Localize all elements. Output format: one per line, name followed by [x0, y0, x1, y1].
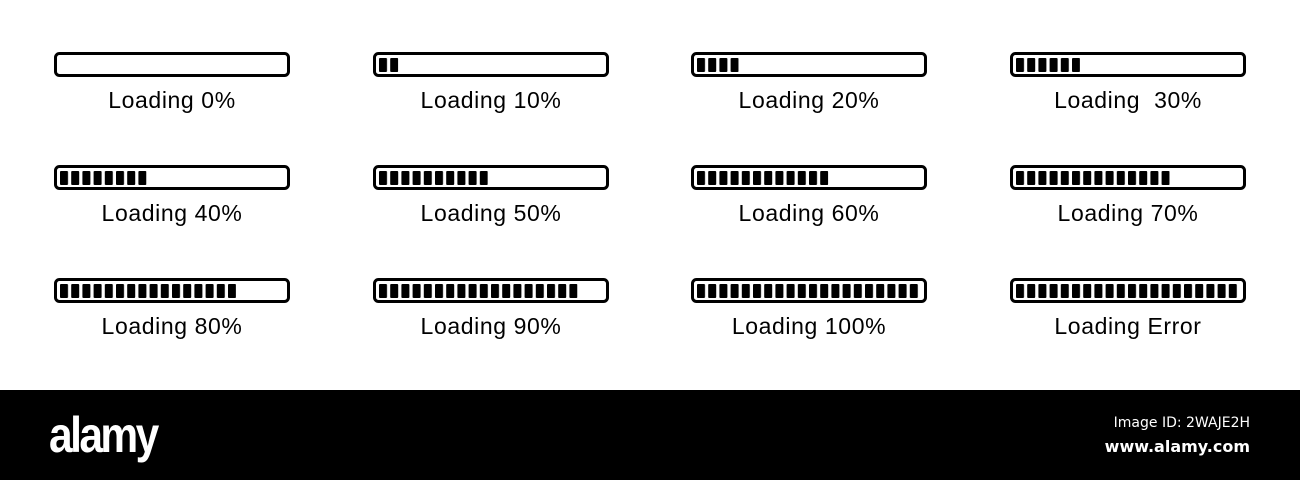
progress 100%: Loading 100% [732, 313, 886, 339]
progress 10% [374, 54, 608, 113]
website: www.alamy.com [1105, 437, 1250, 456]
progress 100% [692, 280, 926, 339]
progress error [1012, 280, 1244, 339]
progress 30% [1012, 54, 1244, 113]
progress 30%: Loading 30% [1054, 87, 1202, 113]
progress 20%: Loading 20% [739, 87, 879, 113]
image id: Image ID: 2WAJE2H [1114, 415, 1250, 431]
progress 90%: Loading 90% [421, 313, 561, 339]
footer bar [0, 390, 1300, 480]
progress 60%: Loading 60% [739, 200, 879, 226]
progress 80% [56, 280, 288, 339]
progress 80%: Loading 80% [102, 313, 242, 339]
progress 70% [1012, 166, 1244, 226]
progress 40%: Loading 40% [102, 200, 242, 226]
progress 0%: Loading 0% [108, 87, 236, 113]
progress 90% [374, 280, 608, 339]
progress error: Loading Error [1054, 313, 1202, 339]
progress 50% [374, 166, 608, 226]
logo: alamy: alamy [49, 407, 159, 463]
progress 0% [56, 54, 288, 113]
progress 70%: Loading 70% [1058, 200, 1198, 226]
progress 40% [56, 166, 288, 226]
progress 60% [692, 166, 926, 226]
progress 20% [692, 54, 926, 113]
progress 10%: Loading 10% [421, 87, 561, 113]
progress 50%: Loading 50% [421, 200, 561, 226]
